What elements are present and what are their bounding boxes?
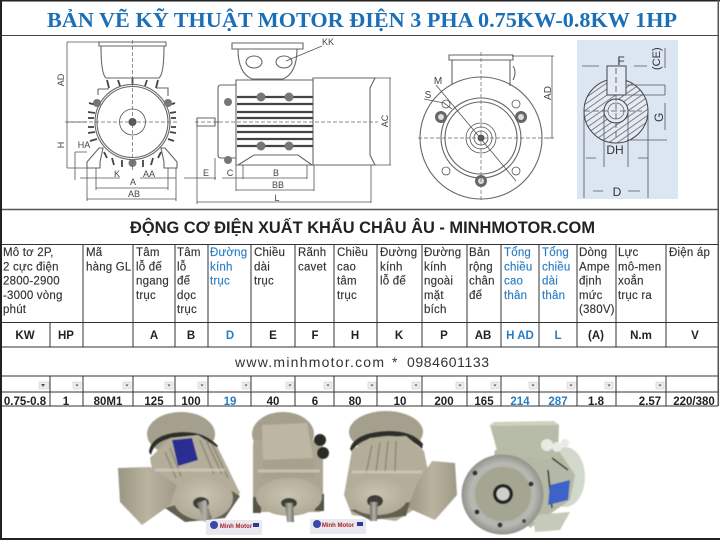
table header labels: lỗ đế [380,275,406,288]
table symbol row: V [691,330,699,342]
filter buttons row [39,382,664,389]
drawing: motor flange view: M [434,76,442,87]
table symbol row: L [554,330,562,342]
drawing: motor side view: C [227,168,234,178]
table header labels: trục [254,276,274,288]
table header labels: Chiều [337,247,368,259]
table header labels: dọc [177,290,196,302]
photo: motor with side terminal box [118,412,240,525]
table symbol row: E [269,330,277,342]
photo: motor with box on the right [344,411,457,521]
drawing: motor front view: AA [143,169,155,179]
table header labels: chiều [504,261,532,273]
website and phone line: www.minhmotor.com [234,354,384,370]
table header labels: trục [337,290,357,302]
drawing: shaft cross-section panel: (CE) [651,47,663,70]
table symbol row: HP [58,330,74,342]
table header labels: lỗ đế [136,260,162,273]
table header labels: trục [177,304,197,316]
label: Minh Motor sticker: Minh Motor [322,523,355,529]
drawing: shaft cross-section panel: F [617,54,625,68]
table symbol row: F [311,330,319,342]
table symbol row: N.m [630,330,652,342]
table header labels: Lực [618,247,638,259]
table header labels: chiều [542,261,570,273]
table header labels: Rãnh [298,247,326,259]
table header labels: Đường [380,247,417,259]
table symbol row: H [351,330,359,342]
website and phone line [234,354,489,370]
drawing: motor flange view: AD [543,86,554,100]
table header labels: Chiều [254,247,285,259]
drawing: motor flange view [418,52,554,200]
table symbol row: AB [475,330,491,342]
label: Minh Motor sticker [206,520,262,535]
table data row: 220/380 [673,396,715,408]
table header labels: thân [504,290,527,302]
table header labels: -3000 vòng [3,290,63,302]
table header labels: phút [3,304,27,316]
table data row: 19 [224,396,236,408]
table data row: 2.57 [639,396,661,408]
website and phone line: * [392,354,398,370]
table header labels: Bản [469,247,490,259]
label: Minh Motor sticker [310,519,366,534]
table header labels: 2 cực điện [3,261,59,273]
table header labels: mặt [424,290,444,302]
heading: export motor: ĐỘNG CƠ ĐIỆN XUẤT KHẨU CHÂU ÂU - MINHMOTOR.COM [130,218,595,237]
table header labels: thân [542,290,565,302]
table header labels: Tâm [136,247,160,259]
table data row: 0.75-0.8 [4,396,47,408]
table data row: 1 [63,396,70,408]
table header labels: dài [254,261,270,273]
table data row: 100 [181,396,201,408]
label: Minh Motor sticker: Minh Motor [220,524,253,530]
photo: motor with metal flange [462,421,585,534]
photo: motor top view [252,412,329,522]
drawing: motor front view: AD [56,73,66,86]
table header labels [3,247,710,316]
drawing: motor front view [56,40,178,201]
table data row: 200 [434,396,454,408]
drawing: motor flange view: S [425,90,432,101]
table symbol row [15,330,699,342]
table header labels: bích [424,304,447,316]
table header labels: kính [380,261,403,273]
table header labels: lỗ [177,260,186,273]
table header labels: dài [542,276,558,288]
table header labels: Tổng [542,247,569,259]
table symbol row: A [150,330,158,342]
table data row: 214 [510,396,530,408]
drawing: motor side view [184,37,391,204]
drawing: motor front view: A [130,177,136,187]
table data row: 287 [548,396,568,408]
table symbol row: P [440,330,448,342]
drawing: motor side view: KK [322,37,334,47]
specification table grid [2,244,718,406]
table header labels: rộng [469,261,493,273]
table data row: 125 [144,396,164,408]
table header labels: trục ra [618,290,652,302]
table symbol row: H AD [506,330,534,342]
table symbol row: K [395,330,404,342]
drawing: shaft cross-section panel: G [652,113,666,122]
title: BẢN VẼ KỸ THUẬT MOTOR ĐIỆN 3 PHA 0.75KW-0.8KW 1HP [47,8,677,32]
table header labels: định [579,276,602,288]
drawing: motor front view: H [56,142,66,148]
table header labels: ngoài [424,276,453,288]
table header labels: mức [579,290,603,302]
table header labels: Điện áp [669,247,710,259]
table header labels: đế [177,276,191,288]
table header labels: Dòng [579,247,607,259]
table header labels: trục [136,290,156,302]
table header labels: xoắn [618,275,644,288]
table data row: 10 [394,396,406,408]
table header labels: chân [469,276,495,288]
drawing: motor front view: AB [128,189,140,199]
table symbol row: KW [15,330,35,342]
table header labels: cao [337,261,356,273]
table header labels: trục [210,276,230,288]
table header labels: Mã [86,247,103,259]
table header labels: (380V) [579,304,615,316]
table header labels: Mô tơ 2P, [3,247,54,259]
website and phone line: 0984601133 [407,354,489,370]
table data row: 80 [349,396,361,408]
table header labels: cavet [298,261,327,273]
table header labels: 2800-2900 [3,276,60,288]
drawing: motor side view: AC [380,114,390,127]
drawing: motor side view: E [203,168,209,178]
table header labels: kính [210,261,233,273]
table data row: 1.8 [588,396,605,408]
table header labels: mô-men [618,261,661,273]
table header labels: tâm [337,276,357,288]
table header labels: đế [469,290,483,302]
table header labels: Tâm [177,247,201,259]
drawing: shaft cross-section panel: D [613,185,622,199]
drawing: motor front view: K [114,169,120,179]
table data row: 165 [474,396,494,408]
drawing: motor side view: L [274,193,280,203]
table header labels: Đường [424,247,461,259]
table header labels: Tổng [504,247,531,259]
drawing: shaft cross-section panel: DH [606,143,624,157]
table data row: 6 [312,396,318,408]
table header labels: kính [424,261,447,273]
table data row: 40 [267,396,279,408]
table header labels: hàng GL [86,261,132,273]
table header labels: ngang [136,276,169,288]
table symbol row: B [187,330,195,342]
table header labels: Đường [210,247,247,259]
table header labels: Ampe [579,261,610,273]
table symbol row: (A) [588,330,604,342]
table header labels: cao [504,276,523,288]
drawing: motor side view: B [273,168,279,178]
drawing: motor side view: BB [272,180,284,190]
table symbol row: D [226,330,234,342]
drawing: shaft cross-section panel [577,40,678,199]
drawing: motor front view: HA [78,140,90,150]
table data row: 80M1 [94,396,123,408]
table data row [4,396,715,408]
